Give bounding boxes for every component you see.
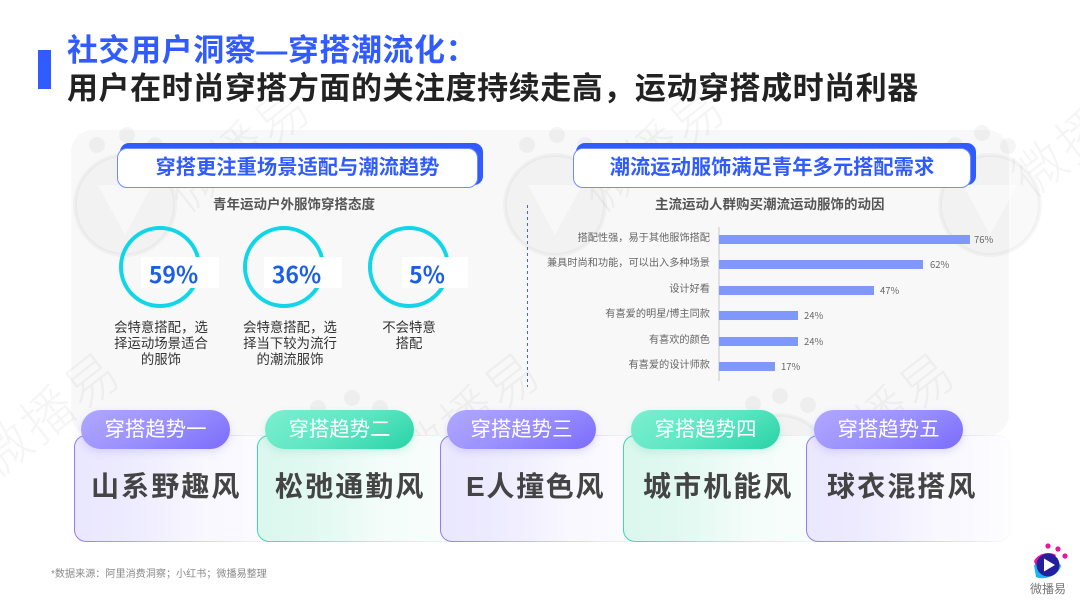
- accent bar: [38, 50, 51, 89]
- pill: trend three: 穿搭趋势三: [471, 419, 572, 441]
- bar chart: 设计好看: [669, 284, 710, 295]
- stat: 36%: 会特意搭配，选: [243, 320, 337, 335]
- bar chart: 76%: [974, 232, 993, 246]
- stat: 36%: 36%: [272, 256, 321, 290]
- stat: 59%: 的服饰: [141, 352, 181, 367]
- card: trend five: 球衣混搭风: [827, 471, 978, 502]
- pill: trend one: [81, 410, 230, 449]
- watermark layer: 微播易: [157, 76, 323, 224]
- heading: left section: [117, 143, 483, 188]
- pill: trend five: [814, 410, 963, 449]
- card: trend one: [74, 435, 278, 542]
- stat: 36%: 择当下较为流行: [243, 336, 337, 351]
- heading: right section: [573, 143, 976, 188]
- stat: 59%: 择运动场景适合: [114, 336, 208, 351]
- subheading: motives: 主流运动人群购买潮流运动服饰的动因: [655, 197, 884, 212]
- card: trend five: [806, 435, 1010, 542]
- bar chart: 24%: [804, 308, 823, 322]
- pill: trend four: 穿搭趋势四: [655, 419, 756, 441]
- source note: *数据来源：阿里消费洞察；小红书；微播易整理: [51, 569, 267, 580]
- card: trend four: 城市机能风: [643, 471, 794, 502]
- stat: 59%: 会特意搭配，选: [114, 320, 208, 335]
- title: 用户在时尚穿搭方面的关注度持续走高，运动穿搭成时尚利器: [67, 71, 919, 106]
- bar chart: 有喜爱的明星/博主同款: [605, 309, 710, 320]
- title: [67, 33, 919, 106]
- pill: trend one: 穿搭趋势一: [105, 419, 206, 441]
- pill: trend four: [631, 410, 780, 449]
- stat: 36%: 的潮流服饰: [257, 352, 323, 367]
- bar chart: 62%: [930, 257, 949, 271]
- pill: trend three: [447, 410, 596, 449]
- card: trend four: [623, 435, 827, 542]
- pill: trend two: 穿搭趋势二: [289, 419, 390, 441]
- divider: [527, 205, 528, 387]
- bar chart: 24%: [804, 334, 823, 348]
- pill: trend five: 穿搭趋势五: [838, 419, 939, 441]
- bar chart: 17%: [781, 359, 800, 373]
- heading: right section: 潮流运动服饰满足青年多元搭配需求: [610, 157, 934, 179]
- stat: 5%: [368, 226, 449, 351]
- title: 社交用户洞察—穿搭潮流化：: [67, 33, 477, 68]
- bar chart: 47%: [880, 283, 899, 297]
- subheading: attitude: 青年运动户外服饰穿搭态度: [213, 197, 375, 212]
- stat: 36%: [243, 226, 337, 367]
- stat: 59%: 59%: [149, 256, 198, 290]
- logo: [1030, 543, 1068, 596]
- watermark layer: 微播易: [572, 76, 738, 224]
- logo: 微播易: [1030, 582, 1066, 596]
- stat: 5%: 搭配: [396, 336, 422, 351]
- card: trend three: E人撞色风: [466, 471, 605, 502]
- card: trend three: [440, 435, 644, 542]
- panel background: [71, 130, 1009, 436]
- heading: left section: 穿搭更注重场景适配与潮流趋势: [156, 157, 439, 179]
- card: trend one: 山系野趣风: [91, 471, 242, 502]
- card: trend two: [257, 435, 461, 542]
- bar chart: 有喜欢的颜色: [649, 335, 710, 346]
- bar chart: 兼具时尚和功能，可以出入多种场景: [547, 258, 710, 269]
- stat: 5%: 不会特意: [382, 320, 436, 335]
- card: trend two: 松弛通勤风: [275, 471, 426, 502]
- bar chart: 有喜爱的设计师款: [628, 360, 710, 371]
- watermark layer: 微播易: [802, 341, 968, 489]
- watermark layer: 微播易: [387, 341, 553, 489]
- stat: 59%: [114, 226, 208, 367]
- stat: 5%: 5%: [409, 256, 445, 290]
- pill: trend two: [265, 410, 414, 449]
- bar chart: 搭配性强，易于其他服饰搭配: [578, 233, 710, 244]
